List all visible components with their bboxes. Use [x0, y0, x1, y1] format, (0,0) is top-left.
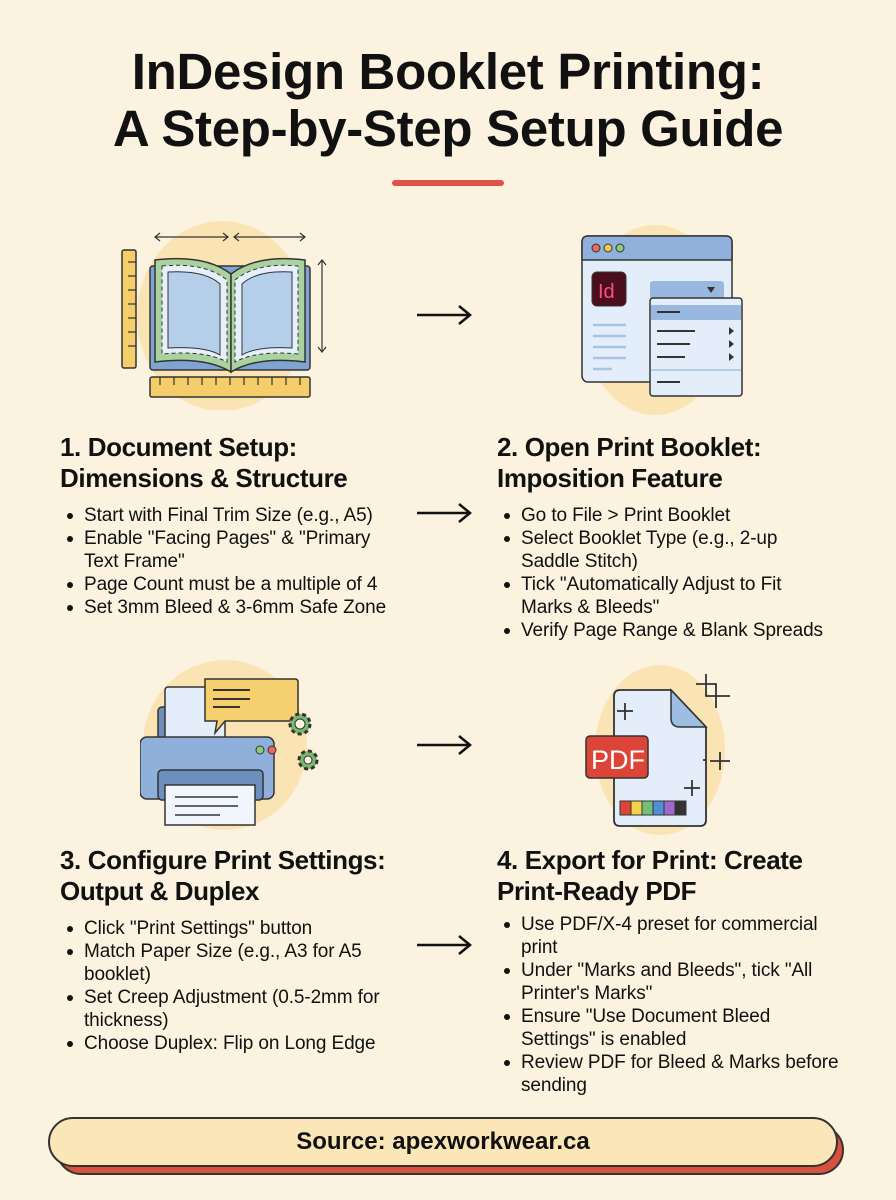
step 3 bullets: Match Paper Size (e.g., A3 for A5: [84, 941, 362, 962]
step 2 heading: Imposition Feature: [497, 463, 722, 493]
step 1 bullets: Set 3mm Bleed & 3-6mm Safe Zone: [84, 597, 386, 618]
arrow 4: [417, 935, 472, 955]
step 4 bullets: print: [521, 937, 557, 958]
step 4 bullets: [504, 914, 839, 1096]
step 3 bullets: [67, 918, 380, 1054]
step 3 bullets: Click "Print Settings" button: [84, 918, 312, 939]
step 2 bullets: Select Booklet Type (e.g., 2-up: [521, 528, 777, 549]
step 1 bullets: Start with Final Trim Size (e.g., A5): [84, 505, 373, 526]
icon: printer with gears: [140, 660, 318, 830]
step 4 bullets: sending: [521, 1075, 587, 1096]
step 3 heading: [60, 845, 385, 906]
step 3 heading: Output & Duplex: [60, 876, 259, 906]
step 4 bullets: Under "Marks and Bleeds", tick "All: [521, 960, 812, 981]
step 2 heading: [497, 432, 761, 493]
step 4 bullets: Settings" is enabled: [521, 1029, 686, 1050]
step 4 bullets: Ensure "Use Document Bleed: [521, 1006, 770, 1027]
icon: open book with rulers: [121, 221, 326, 410]
footer source pill: [48, 1117, 844, 1175]
step 2 bullets: [504, 505, 823, 641]
step 1 heading: [60, 432, 347, 493]
step 1 bullets: [67, 505, 386, 618]
step 2 bullets: Tick "Automatically Adjust to Fit: [521, 574, 781, 595]
step 4 bullets: Review PDF for Bleed & Marks before: [521, 1052, 839, 1073]
step 1 bullets: Page Count must be a multiple of 4: [84, 574, 377, 595]
step 1 bullets: Enable "Facing Pages" & "Primary: [84, 528, 370, 549]
icon: PDF document with crop marks: [585, 665, 730, 835]
step 3 heading: 3. Configure Print Settings:: [60, 845, 385, 875]
title underline accent: [392, 180, 504, 186]
step 4 heading: [497, 845, 803, 906]
arrow 1: [417, 305, 472, 325]
step 3 bullets: Set Creep Adjustment (0.5-2mm for: [84, 987, 380, 1008]
step 4 bullets: Use PDF/X-4 preset for commercial: [521, 914, 818, 935]
step 3 bullets: Choose Duplex: Flip on Long Edge: [84, 1033, 376, 1054]
step 4 heading: 4. Export for Print: Create: [497, 845, 803, 875]
title: [113, 43, 783, 157]
arrow 2: [417, 503, 472, 523]
step 3 bullets: thickness): [84, 1010, 169, 1031]
title: A Step-by-Step Setup Guide: [113, 100, 783, 157]
step 4 bullets: Printer's Marks": [521, 983, 652, 1004]
step 2 bullets: Marks & Bleeds": [521, 597, 659, 618]
step 1 bullets: Text Frame": [84, 551, 185, 572]
footer source pill: Source: apexworkwear.ca: [296, 1128, 590, 1155]
arrow 3: [417, 735, 472, 755]
icon: PDF document with crop marks: PDF: [591, 745, 645, 775]
step 2 bullets: Saddle Stitch): [521, 551, 638, 572]
step 1 heading: Dimensions & Structure: [60, 463, 347, 493]
title: InDesign Booklet Printing:: [132, 43, 764, 100]
step 2 bullets: Verify Page Range & Blank Spreads: [521, 620, 823, 641]
icon: InDesign window with menu: Id: [598, 281, 615, 303]
step 2 heading: 2. Open Print Booklet:: [497, 432, 761, 462]
icon: InDesign window with menu: [581, 225, 743, 415]
step 4 heading: Print-Ready PDF: [497, 876, 696, 906]
step 3 bullets: booklet): [84, 964, 151, 985]
step 1 heading: 1. Document Setup:: [60, 432, 297, 462]
step 2 bullets: Go to File > Print Booklet: [521, 505, 730, 526]
